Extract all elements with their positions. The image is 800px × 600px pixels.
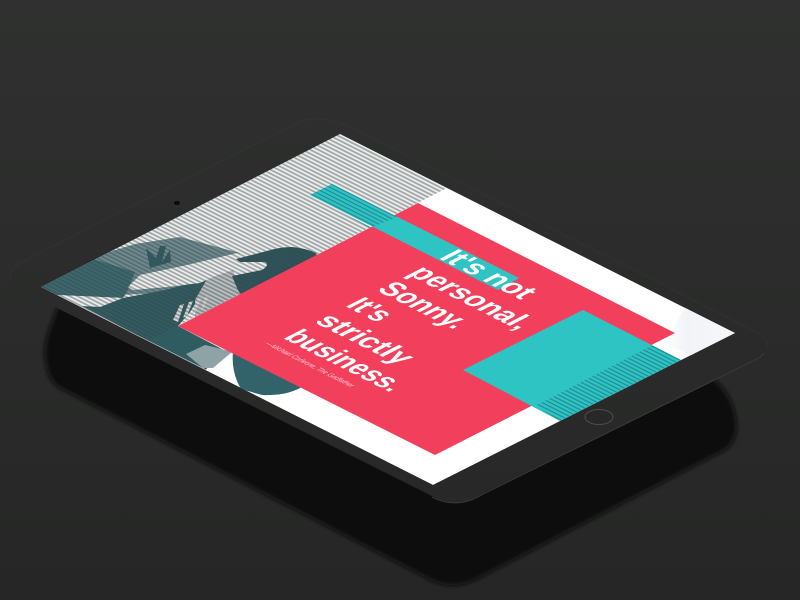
hair [232,247,317,294]
home button [585,410,613,424]
quote line 4: It's [338,293,403,326]
tablet screen [41,134,740,485]
bottom-left edge reflection [130,332,206,370]
hand shadow [146,246,171,268]
quote line 1: It's not [432,245,546,303]
photo: businessman [41,237,325,395]
teal square [463,310,681,422]
lower side edge of tablet [432,353,764,503]
face [195,270,240,318]
body outline highlight [10,119,767,347]
square hatching [535,345,681,422]
red quote panel [178,203,675,455]
tie stripes [173,297,208,322]
attribution: —Michael Corleone, The Godfather [262,340,357,388]
quote line 5: strictly [307,309,425,369]
raised arm [128,253,240,290]
white page [41,134,735,485]
stripe overlay [41,134,447,341]
tablet body [10,119,767,502]
corner glare [679,308,735,356]
tablet mockup scene [10,118,764,588]
white shirt strip [57,295,122,298]
tablet cast shadow [45,300,737,585]
striped photo area [41,134,447,341]
sleeve area [41,237,240,295]
jacket [82,278,222,371]
teal top bar [310,184,519,290]
quote line 3: Sonny. [370,277,479,333]
light collar patch [186,345,232,368]
quote text [276,245,574,397]
dark left sleeve [41,258,135,298]
quote line 6: business. [276,325,415,396]
quote line 2: personal, [401,261,543,334]
shoulder [233,352,305,395]
top bar hatching [310,184,397,228]
front camera [174,201,180,205]
